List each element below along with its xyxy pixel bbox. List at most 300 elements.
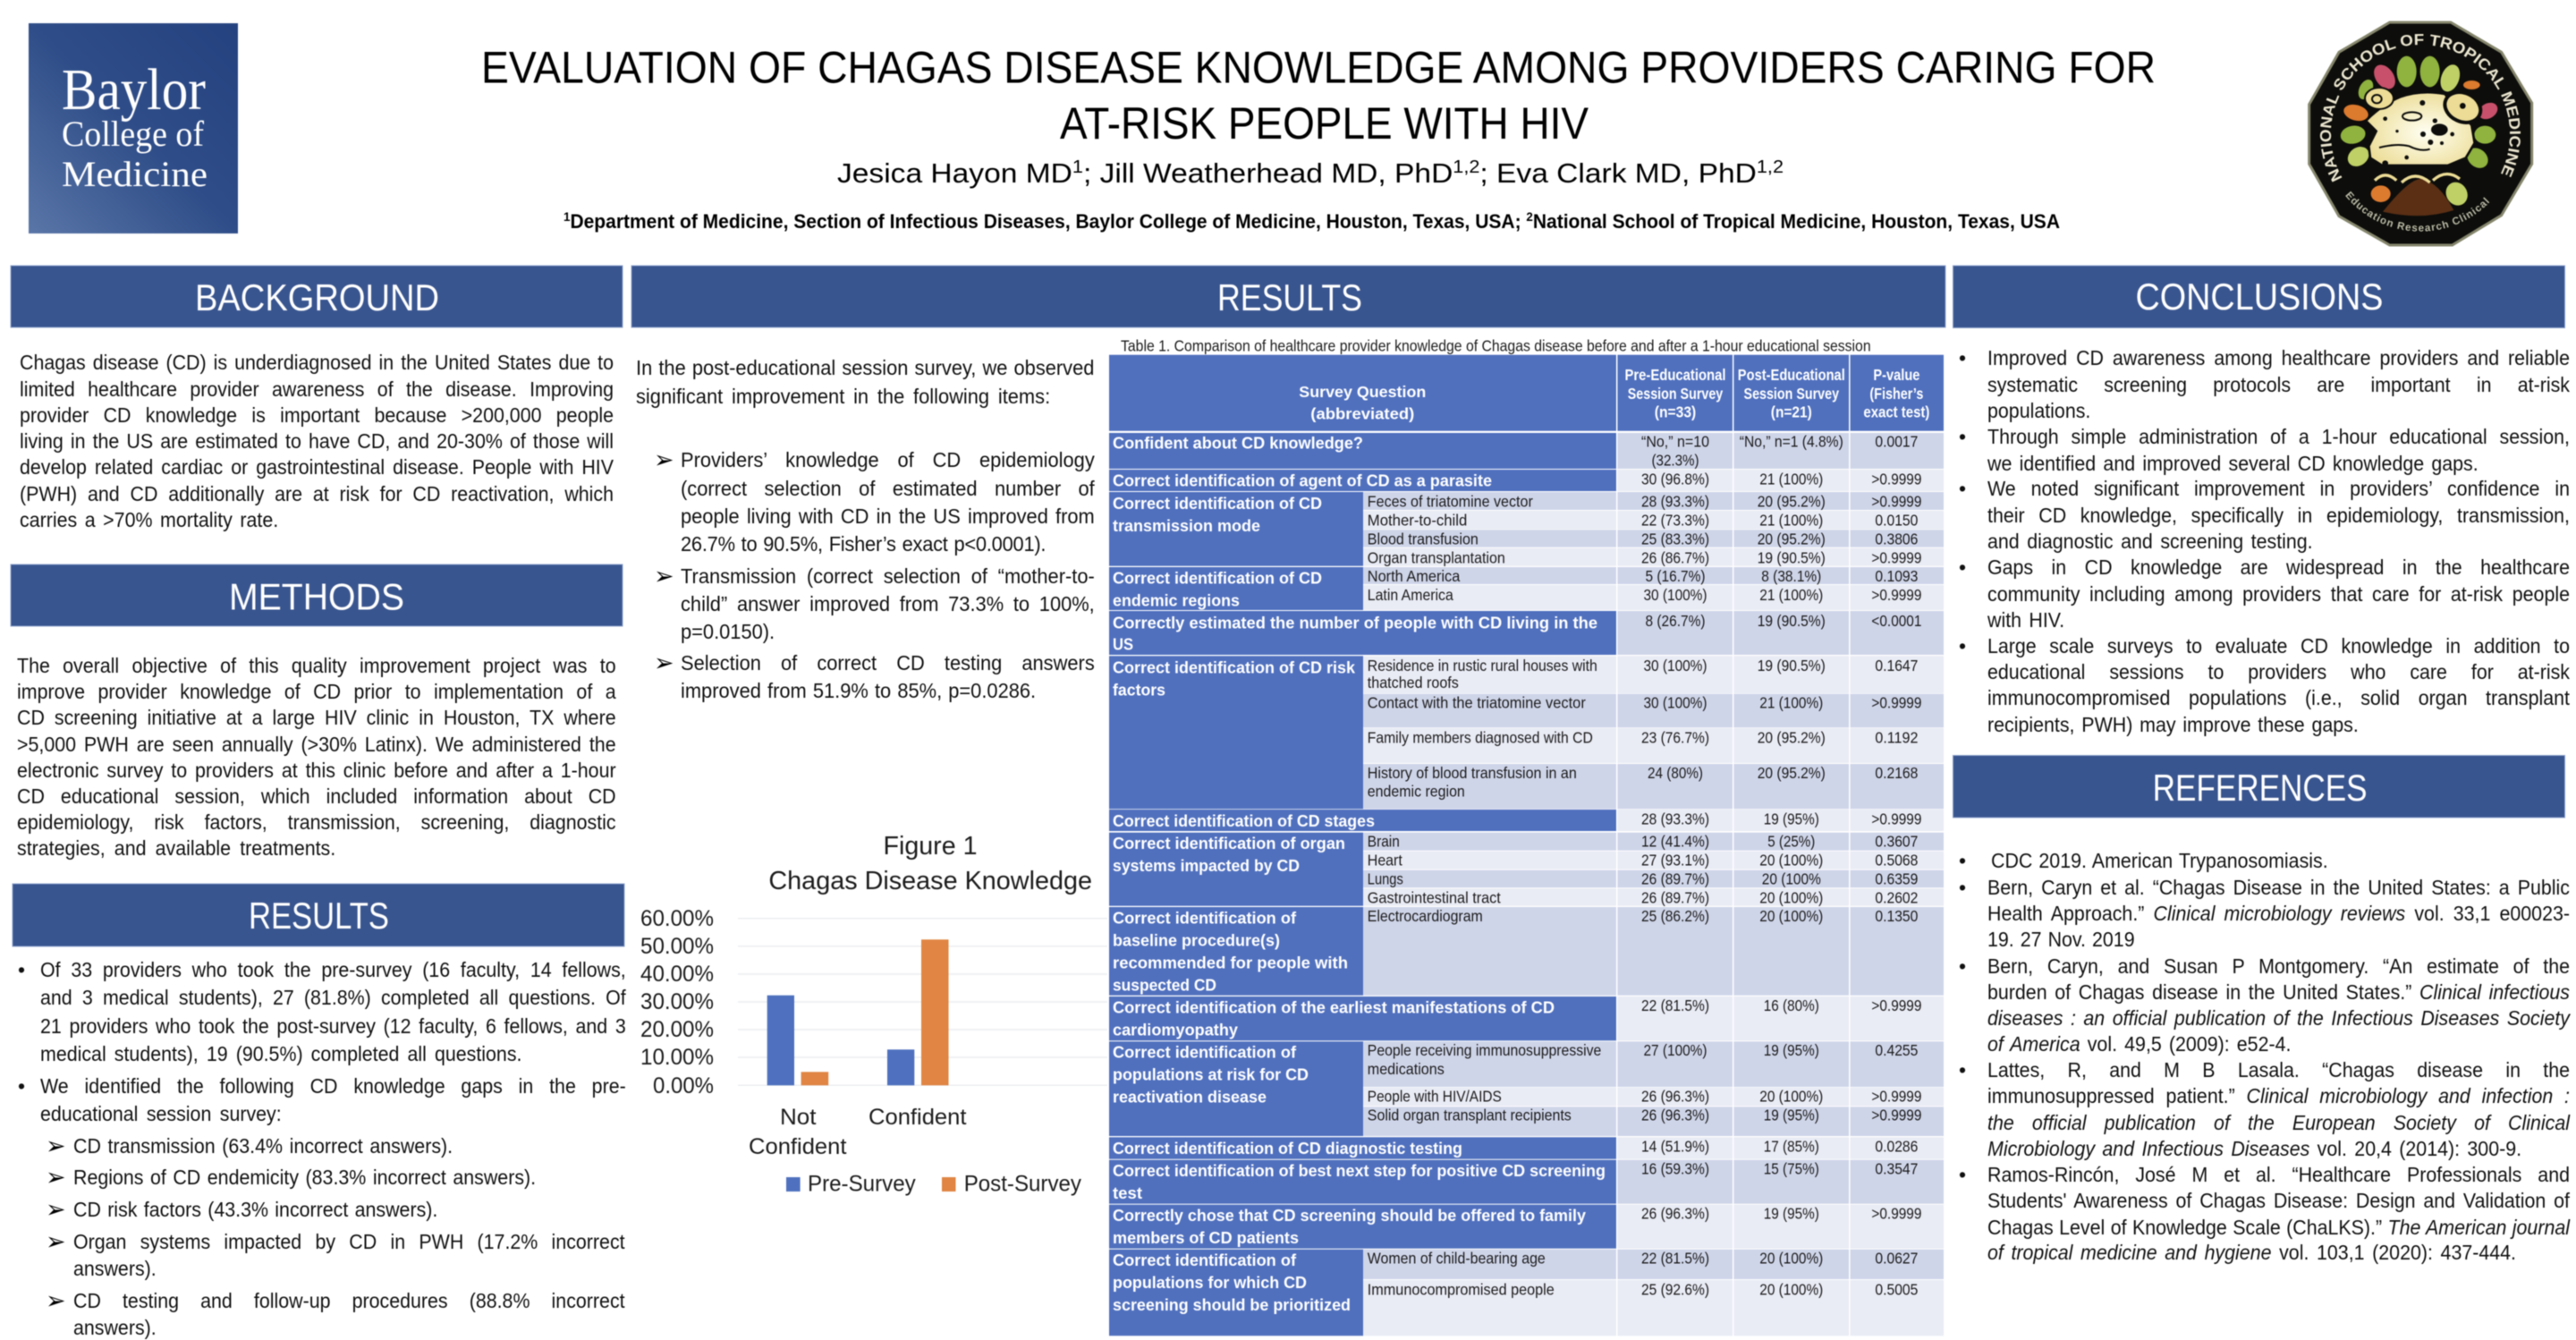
- text: results left column: Of 33 providers who took the pre-survey (16 faculty, 14 fellows,: [39, 958, 625, 981]
- table sub-question labels: Mother-to-child: [1368, 511, 1467, 529]
- table column: p-values: 0.3806: [1875, 530, 1918, 547]
- table question labels: populations for which CD: [1113, 1273, 1307, 1292]
- text: background: provider CD knowledge is important because >200,000 people: [20, 403, 614, 427]
- text: background: develop related cardiac or gastrointestinal disease. People with HIV: [20, 455, 614, 479]
- table column: post-educational values: 15 (75%): [1764, 1159, 1819, 1177]
- text: results middle column: (correct selection of estimated number of: [681, 477, 1094, 500]
- heading: results left: RESULTS: [249, 895, 389, 937]
- category labels: [749, 1105, 967, 1159]
- table column: post-educational values: 21 (100%): [1759, 471, 1823, 488]
- text: references: •: [1959, 1163, 1966, 1186]
- text: results left column: answers).: [73, 1257, 157, 1280]
- authors: 1: [1072, 157, 1083, 177]
- table header: Pre-Educational: [1624, 366, 1726, 384]
- text: results left column: answers).: [73, 1316, 157, 1339]
- logo: National School of Tropical Medicine: NATIONAL SCHOOL OF TROPICAL MEDICINE: [2319, 33, 2521, 182]
- table question labels: recommended for people with: [1113, 954, 1348, 972]
- table column: pre-educational values: 8 (26.7%): [1646, 612, 1705, 630]
- text: results left column: ➢: [46, 1228, 66, 1256]
- table column: pre-educational values: 26 (89.7%): [1641, 869, 1709, 887]
- affiliations: 2: [1526, 209, 1533, 224]
- authors: 1,2: [1757, 157, 1784, 177]
- table column: p-values: 0.0017: [1875, 432, 1918, 450]
- text: methods: The overall objective of this quality improvement project was to: [17, 654, 616, 677]
- table column: p-values: >0.9999: [1871, 586, 1921, 604]
- y axis labels: 30.00%: [640, 989, 714, 1014]
- text: references: 19. 27 Nov. 2019: [1987, 928, 2135, 951]
- table column: p-values: 0.5068: [1875, 852, 1918, 869]
- chart title: [768, 832, 1092, 895]
- text: results middle column: improved from 51.9% to 85%, p=0.0286.: [681, 679, 1036, 702]
- table question labels: cardiomyopathy: [1113, 1020, 1239, 1039]
- table sub-question labels: Heart: [1368, 852, 1402, 869]
- heading: conclusions: [1953, 266, 2565, 327]
- table column: pre-educational values: 27 (93.1%): [1641, 852, 1709, 869]
- table column: post-educational values: 20 (100%): [1759, 1249, 1823, 1267]
- table sub-question labels: endemic region: [1368, 783, 1465, 801]
- text: results middle column: ➢: [654, 446, 674, 474]
- text: references: •: [1959, 1058, 1966, 1081]
- table sub-question labels: Residence in rustic rural houses with: [1368, 657, 1597, 674]
- table question labels: [1113, 434, 1606, 1314]
- text: conclusions: Improved CD awareness among healthcare providers and reliable: [1987, 346, 2570, 369]
- text: results middle column: ➢: [654, 649, 674, 677]
- table column: post-educational values: 21 (100%): [1759, 694, 1823, 712]
- y axis labels: 50.00%: [640, 934, 714, 959]
- title: AT-RISK PEOPLE WITH HIV: [1060, 98, 1589, 148]
- table column: post-educational values: 19 (90.5%): [1758, 612, 1826, 630]
- table sub-question labels: Immunocompromised people: [1368, 1280, 1555, 1298]
- text: conclusions: their CD knowledge, specifically in epidemiology, transmission,: [1987, 504, 2570, 527]
- table question labels: transmission mode: [1113, 516, 1260, 535]
- table question labels: members of CD patients: [1113, 1228, 1299, 1247]
- text: references: of tropical medicine and hygiene vol. 103,1 (2020): 437-444.: [1987, 1241, 2516, 1264]
- heading: results main: [631, 266, 1945, 327]
- table column: pre-educational values: 30 (100%): [1644, 657, 1707, 674]
- y axis labels: 0.00%: [653, 1073, 714, 1098]
- table column: pre-educational values: 22 (73.3%): [1641, 511, 1709, 529]
- text: background: limited healthcare provider awareness of the disease. Improving: [20, 377, 614, 401]
- table column: pre-educational values: 23 (76.7%): [1641, 729, 1709, 747]
- table column: p-values: 0.6359: [1875, 869, 1918, 887]
- table column: p-values: 0.0286: [1875, 1137, 1918, 1155]
- table column: post-educational values: 20 (100%): [1759, 907, 1823, 925]
- table question labels: Correct identification of best next step for positive CD screening: [1113, 1161, 1606, 1180]
- text: methods: improve provider knowledge of CD prior to implementation of a: [17, 680, 616, 703]
- table header: (n=33): [1655, 403, 1696, 421]
- text: conclusions: with HIV.: [1987, 608, 2064, 632]
- table question labels: baseline procedure(s): [1113, 931, 1280, 950]
- table column: post-educational values: 20 (95.2%): [1758, 729, 1826, 747]
- table question labels: screening should be prioritized: [1113, 1295, 1351, 1314]
- table sub-question labels: Blood transfusion: [1368, 530, 1479, 547]
- table column: post-educational values: 19 (95%): [1764, 810, 1819, 828]
- table column: pre-educational values: 5 (16.7%): [1646, 567, 1705, 585]
- text: references: Lattes, R, and M B Lasala. “Chagas disease in the: [1987, 1058, 2570, 1081]
- authors: Jesica Hayon MD: [837, 157, 1055, 189]
- text: methods: [16, 654, 617, 861]
- table column: post-educational values: 20 (95.2%): [1758, 530, 1826, 547]
- table column: post-educational values: 20 (100%): [1759, 852, 1823, 869]
- table question labels: Correct identification of agent of CD as a parasite: [1113, 471, 1492, 489]
- table column: pre-educational values: 14 (51.9%): [1641, 1137, 1709, 1155]
- affiliations: National School of Tropical Medicine, Houston, Texas, USA: [1533, 210, 2060, 233]
- table column: pre-educational values: 25 (92.6%): [1641, 1280, 1709, 1298]
- text: results left column: and 3 medical students), 27 (81.8%) completed all questions. Of: [39, 986, 625, 1009]
- table column: p-values: >0.9999: [1871, 1204, 1921, 1222]
- table column: p-values: 0.1647: [1875, 657, 1918, 674]
- table sub-question labels: North America: [1368, 567, 1461, 585]
- text: results left column: Regions of CD endemicity (83.3% incorrect answers).: [73, 1166, 536, 1189]
- table column: post-educational values: 20 (100%): [1759, 888, 1823, 906]
- text: methods: strategies, and available treatments.: [17, 836, 335, 860]
- table column: post-educational values: 19 (90.5%): [1758, 657, 1826, 674]
- heading: references: [1953, 755, 2565, 818]
- text: references: •: [1959, 954, 1966, 978]
- table column: p-values: 0.3547: [1875, 1159, 1918, 1177]
- table question labels: suspected CD: [1113, 976, 1216, 995]
- authors: ; Eva Clark MD, PhD: [1479, 157, 1757, 189]
- table column: p-values: 0.3607: [1875, 833, 1918, 851]
- table column: post-educational values: 20 (100%): [1759, 1088, 1823, 1106]
- table column: p-values: 0.4255: [1875, 1041, 1918, 1059]
- text: results middle column: Selection of correct CD testing answers: [681, 651, 1094, 674]
- text: results middle column: Providers’ knowledge of CD epidemiology: [681, 448, 1094, 471]
- text: methods: CD educational session, which included information about CD: [17, 784, 616, 808]
- authors: 1,2: [1453, 157, 1479, 177]
- table header: Session Survey: [1628, 385, 1723, 403]
- text: conclusions: and diagnostic and screening testing.: [1987, 530, 2313, 553]
- table header: (n=21): [1771, 403, 1812, 421]
- table column: p-values: >0.9999: [1871, 471, 1921, 488]
- text: methods: CD screening initiative at a large HIV clinic in Houston, TX where: [17, 706, 616, 729]
- text: results middle column: people living with CD in the US improved from: [681, 505, 1094, 528]
- text: results left column: [18, 958, 626, 1340]
- table column: p-values: 0.2168: [1875, 764, 1918, 782]
- y axis labels: 20.00%: [640, 1017, 714, 1042]
- text: references: CDC 2019. American Trypanosomiasis.: [1991, 849, 2327, 872]
- text: conclusions: recipients, PWH) may improve these gaps.: [1987, 713, 2359, 736]
- text: results left column: •: [18, 1074, 25, 1098]
- table header: exact test): [1863, 403, 1929, 421]
- heading: results main: RESULTS: [1217, 276, 1362, 318]
- table sub-question labels: Solid organ transplant recipients: [1368, 1107, 1572, 1124]
- table question labels: Correct identification of: [1113, 909, 1297, 928]
- text: conclusions: we identified and improved several CD knowledge gaps.: [1987, 452, 2479, 475]
- table question labels: Correctly chose that CD screening should be offered to family: [1113, 1206, 1587, 1225]
- heading: background: [11, 266, 623, 327]
- text: conclusions: community including among providers that care for at-risk people: [1987, 582, 2570, 606]
- text: methods: electronic survey to providers at this clinic before and after a 1-hour: [17, 759, 616, 782]
- text: results left column: Organ systems impacted by CD in PWH (17.2% incorrect: [73, 1230, 625, 1253]
- text: conclusions: Gaps in CD knowledge are widespread in the healthcare: [1987, 556, 2570, 579]
- table column: p-values: >0.9999: [1871, 1088, 1921, 1106]
- table column: p-values: >0.9999: [1871, 997, 1921, 1014]
- table sub-question labels: [1368, 493, 1601, 1298]
- authors: ; Jill Weatherhead MD, PhD: [1083, 157, 1453, 189]
- table question labels: Correct identification of CD: [1113, 494, 1322, 513]
- table column: post-educational values: [1740, 432, 1843, 1298]
- text: conclusions: •: [1959, 346, 1966, 369]
- table column: pre-educational values: [1641, 432, 1709, 1298]
- text: results left column: ➢: [46, 1196, 66, 1224]
- heading: conclusions: CONCLUSIONS: [2136, 276, 2383, 318]
- legend: [786, 1172, 1081, 1197]
- table column: pre-educational values: 30 (100%): [1644, 694, 1707, 712]
- text: references: immunosuppressed patient.” Clinical microbiology and infection :: [1987, 1084, 2570, 1107]
- table header: P-value: [1873, 366, 1920, 384]
- text: references: •: [1959, 876, 1966, 899]
- table column: pre-educational values: 22 (81.5%): [1641, 1249, 1709, 1267]
- text: references: Ramos-Rincón, José M et al. “Healthcare Professionals and: [1987, 1163, 2570, 1186]
- text: results middle column: ➢: [654, 563, 674, 590]
- table 1: [1109, 354, 1944, 1336]
- text: results middle column: p=0.0150).: [681, 620, 775, 643]
- table column: post-educational values: 21 (100%): [1759, 511, 1823, 529]
- category labels: Not: [780, 1105, 817, 1130]
- text: references: burden of Chagas disease in the United States.” Clinical infectious: [1987, 980, 2570, 1004]
- table column: p-values: <0.0001: [1871, 612, 1921, 630]
- legend: Post-Survey: [964, 1172, 1081, 1197]
- table column: pre-educational values: (32.3%): [1651, 452, 1699, 470]
- table row backgrounds: [1109, 354, 1944, 1336]
- y axis labels: 60.00%: [640, 906, 714, 931]
- table column: post-educational values: 20 (95.2%): [1758, 764, 1826, 782]
- text: conclusions: •: [1959, 477, 1966, 500]
- text: background: carries a >70% mortality rate.: [20, 508, 278, 531]
- text: results middle column: significant improvement in the following items:: [636, 385, 1050, 408]
- table column: pre-educational values: 22 (81.5%): [1641, 997, 1709, 1014]
- text: results left column: medical students), 19 (90.5%) completed all questions.: [39, 1042, 521, 1065]
- table header: (Fisher’s: [1869, 385, 1924, 403]
- text: references: Health Approach.” Clinical microbiology reviews vol. 33,1 e00023-: [1987, 902, 2570, 925]
- table column: pre-educational values: 26 (96.3%): [1641, 1204, 1709, 1222]
- table question labels: Correct identification of: [1113, 1251, 1297, 1269]
- table column: post-educational values: 20 (100%: [1762, 869, 1821, 887]
- y axis labels: [640, 906, 714, 1098]
- text: methods: epidemiology, risk factors, transmission, screening, diagnostic: [17, 810, 616, 834]
- text: results middle column: Transmission (correct selection of “mother-to-: [681, 564, 1094, 588]
- text: results left column: ➢: [46, 1132, 66, 1160]
- table sub-question labels: People with HIV/AIDS: [1368, 1088, 1502, 1106]
- table sub-question labels: Gastrointestinal tract: [1368, 888, 1501, 906]
- table column: p-values: [1871, 432, 1921, 1298]
- table column: pre-educational values: 25 (86.2%): [1641, 907, 1709, 925]
- table column: p-values: 0.1093: [1875, 567, 1918, 585]
- table question labels: populations at risk for CD: [1113, 1064, 1309, 1083]
- table column: post-educational values: 19 (95%): [1764, 1204, 1819, 1222]
- table sub-question labels: History of blood transfusion in an: [1368, 764, 1577, 782]
- table column: pre-educational values: 16 (59.3%): [1641, 1159, 1709, 1177]
- text: results left column: ➢: [46, 1164, 66, 1192]
- text: references: [1959, 849, 2571, 1265]
- table column: post-educational values: 17 (85%): [1764, 1137, 1819, 1155]
- affiliations: Department of Medicine, Section of Infectious Diseases, Baylor College of Medicine, Houston, Texas, USA;: [570, 210, 1526, 233]
- bars: [767, 939, 948, 1085]
- logo: Baylor College of Medicine: Medicine: [62, 154, 208, 194]
- text: conclusions: Through simple administration of a 1-hour educational session,: [1987, 425, 2570, 448]
- table question labels: Correct identification of CD risk: [1113, 657, 1356, 676]
- heading: background: BACKGROUND: [195, 276, 439, 318]
- logo: Baylor College of Medicine: College of: [62, 114, 205, 154]
- text: conclusions: Large scale surveys to evaluate CD knowledge in addition to: [1987, 634, 2570, 657]
- text: background: Chagas disease (CD) is underdiagnosed in the United States due to: [20, 351, 614, 374]
- table header: Post-Educational: [1738, 366, 1845, 384]
- table header: Session Survey: [1744, 385, 1839, 403]
- table column: pre-educational values: 27 (100%): [1644, 1041, 1707, 1059]
- category labels: Confident: [869, 1105, 967, 1130]
- logo: Baylor College of Medicine: [29, 23, 238, 233]
- text: results left column: CD transmission (63.4% incorrect answers).: [73, 1134, 453, 1158]
- table sub-question labels: People receiving immunosuppressive: [1368, 1041, 1601, 1059]
- table question labels: Confident about CD knowledge?: [1113, 434, 1363, 453]
- table column: pre-educational values: 12 (41.4%): [1641, 833, 1709, 851]
- chart title: Figure 1: [884, 832, 977, 861]
- heading: references: REFERENCES: [2153, 767, 2368, 809]
- table question labels: reactivation disease: [1113, 1088, 1267, 1107]
- table column: p-values: >0.9999: [1871, 810, 1921, 828]
- y axis labels: 10.00%: [640, 1045, 714, 1070]
- table column: pre-educational values: “No,” n=10: [1641, 432, 1709, 450]
- text: results left column: 21 providers who took the post-survey (12 faculty, 6 fellows, and 3: [39, 1014, 625, 1038]
- text: references: •: [1959, 849, 1966, 872]
- table sub-question labels: Lungs: [1368, 869, 1403, 887]
- text: conclusions: educational sessions to providers who care for at-risk: [1987, 660, 2570, 683]
- category labels: Confident: [749, 1134, 847, 1159]
- table column: post-educational values: 16 (80%): [1764, 997, 1819, 1014]
- table question labels: Correct identification of the earliest manifestations of CD: [1113, 998, 1555, 1017]
- table column: pre-educational values: 28 (93.3%): [1641, 810, 1709, 828]
- text: background: living in the US are estimated to have CD, and 20-30% of those will: [20, 429, 614, 453]
- y axis labels: 40.00%: [640, 962, 714, 987]
- legend: Pre-Survey: [808, 1172, 916, 1197]
- table column: post-educational values: “No,” n=1 (4.8%): [1740, 432, 1843, 450]
- table question labels: Correct identification of CD stages: [1113, 811, 1375, 830]
- table column: post-educational values: 21 (100%): [1759, 586, 1823, 604]
- text: references: Chagas Level of Knowledge Scale (ChaLKS).” The American journal: [1987, 1216, 2570, 1239]
- text: conclusions: [1959, 346, 2571, 737]
- table column: pre-educational values: 26 (96.3%): [1641, 1088, 1709, 1106]
- table question labels: Correct identification of CD diagnostic testing: [1113, 1139, 1462, 1158]
- title: [481, 43, 2156, 148]
- table sub-question labels: thatched roofs: [1368, 674, 1459, 691]
- table column: p-values: >0.9999: [1871, 694, 1921, 712]
- heading: results left: [13, 884, 624, 946]
- table sub-question labels: medications: [1368, 1060, 1445, 1078]
- text: references: Students' Awareness of Chagas Disease: Design and Validation of: [1987, 1189, 2570, 1212]
- text: conclusions: We noted significant improvement in providers’ confidence in: [1987, 477, 2570, 500]
- text: results left column: •: [18, 958, 25, 981]
- table question labels: Correct identification of: [1113, 1042, 1297, 1061]
- text: methods: >5,000 PWH are seen annually (>30% Latinx). We administered the: [17, 733, 616, 756]
- table caption: Table 1. Comparison of healthcare provider knowledge of Chagas disease before and after a 1-hour educational session: [1121, 337, 1871, 355]
- table question labels: Correctly estimated the number of people with CD living in the: [1113, 613, 1597, 632]
- table column: p-values: 0.0627: [1875, 1249, 1918, 1267]
- chart title: Chagas Disease Knowledge: [768, 867, 1092, 895]
- text: references: Microbiology and Infectious Diseases vol. 20,4 (2014): 300-9.: [1987, 1137, 2521, 1160]
- table question labels: US: [1113, 635, 1133, 654]
- text: background: (PWH) and CD additionally are at risk for CD reactivation, which: [20, 482, 614, 505]
- table column: p-values: 0.0150: [1875, 511, 1919, 529]
- text: results middle column: 26.7% to 90.5%, Fisher’s exact p<0.0001).: [681, 532, 1046, 556]
- table column: post-educational values: 20 (100%): [1759, 1280, 1823, 1298]
- text: results middle column: [636, 356, 1095, 703]
- text: results left column: CD risk factors (43.3% incorrect answers).: [73, 1198, 437, 1221]
- table column: p-values: >0.9999: [1871, 1107, 1921, 1124]
- table column: pre-educational values: 28 (93.3%): [1641, 493, 1709, 511]
- text: results middle column: In the post-educational session survey, we observed: [636, 356, 1094, 379]
- logo: National School of Tropical Medicine: [2308, 20, 2534, 247]
- table header: Survey Question: [1299, 383, 1426, 401]
- table column: p-values: 0.2602: [1875, 888, 1918, 906]
- table header: (abbreviated): [1310, 404, 1414, 422]
- table question labels: factors: [1113, 680, 1165, 699]
- table column: p-values: >0.9999: [1871, 493, 1921, 511]
- text: conclusions: systematic screening protocols are important in at-risk: [1987, 373, 2570, 396]
- table column: post-educational values: 19 (95%): [1764, 1041, 1819, 1059]
- table column: post-educational values: 19 (90.5%): [1758, 548, 1826, 566]
- table question labels: test: [1113, 1183, 1142, 1202]
- heading: methods: METHODS: [229, 576, 404, 618]
- table column: pre-educational values: 26 (89.7%): [1641, 888, 1709, 906]
- text: results left column: ➢: [46, 1287, 66, 1315]
- text: conclusions: •: [1959, 556, 1966, 579]
- table question labels: systems impacted by CD: [1113, 856, 1300, 875]
- table column: p-values: 0.1350: [1875, 907, 1919, 925]
- table column: pre-educational values: 26 (96.3%): [1641, 1107, 1709, 1124]
- table column: post-educational values: 20 (95.2%): [1758, 493, 1826, 511]
- table sub-question labels: Brain: [1368, 833, 1400, 851]
- table column: pre-educational values: 30 (100%): [1644, 586, 1707, 604]
- text: background: [20, 351, 614, 532]
- logo: National School of Tropical Medicine: Education Research Clinical: [2345, 191, 2490, 233]
- text: references: Bern, Caryn et al. “Chagas Disease in the United States: a Public: [1987, 876, 2570, 899]
- text: references: the official publication of the European Society of Clinical: [1987, 1111, 2570, 1134]
- table column: pre-educational values: 30 (96.8%): [1641, 471, 1709, 488]
- table column: pre-educational values: 24 (80%): [1648, 764, 1703, 782]
- table column: post-educational values: 19 (95%): [1764, 1107, 1819, 1124]
- text: results left column: CD testing and follow-up procedures (88.8% incorrect: [73, 1289, 625, 1312]
- heading: methods: [11, 564, 623, 626]
- text: results middle column: child” answer improved from 73.3% to 100%,: [681, 592, 1094, 615]
- table sub-question labels: Contact with the triatomine vector: [1368, 694, 1586, 712]
- text: conclusions: immunocompromised populations (i.e., solid organ transplant: [1987, 686, 2570, 709]
- text: results left column: educational session survey:: [39, 1102, 281, 1125]
- text: references: Bern, Caryn, and Susan P Montgomery. “An estimate of the: [1987, 954, 2570, 978]
- table column: p-values: 0.1192: [1875, 729, 1918, 747]
- table column: p-values: >0.9999: [1871, 548, 1921, 566]
- text: conclusions: •: [1959, 634, 1966, 657]
- table sub-question labels: Organ transplantation: [1368, 548, 1505, 566]
- title: EVALUATION OF CHAGAS DISEASE KNOWLEDGE AMONG PROVIDERS CARING FOR: [481, 43, 2156, 93]
- table sub-question labels: Electrocardiogram: [1368, 907, 1483, 925]
- table sub-question labels: Family members diagnosed with CD: [1368, 729, 1593, 747]
- table question labels: Correct identification of CD: [1113, 568, 1322, 587]
- table sub-question labels: Latin America: [1368, 586, 1453, 604]
- affiliations: 1: [564, 209, 571, 224]
- table sub-question labels: Feces of triatomine vector: [1368, 493, 1533, 511]
- table column: post-educational values: 8 (38.1%): [1761, 567, 1821, 585]
- table column: post-educational values: 5 (25%): [1767, 833, 1815, 851]
- table question labels: Correct identification of organ: [1113, 834, 1345, 852]
- text: references: diseases : an official publication of the Infectious Diseases Society: [1987, 1006, 2570, 1030]
- text: references: of America vol. 49,5 (2009): e52-4.: [1987, 1032, 2291, 1056]
- text: conclusions: •: [1959, 425, 1966, 448]
- logo: Baylor College of Medicine: Baylor: [62, 57, 206, 123]
- text: conclusions: populations.: [1987, 399, 2090, 422]
- chart: figure 1 Chagas disease knowledge: [640, 832, 1107, 1197]
- table question labels: endemic regions: [1113, 590, 1240, 609]
